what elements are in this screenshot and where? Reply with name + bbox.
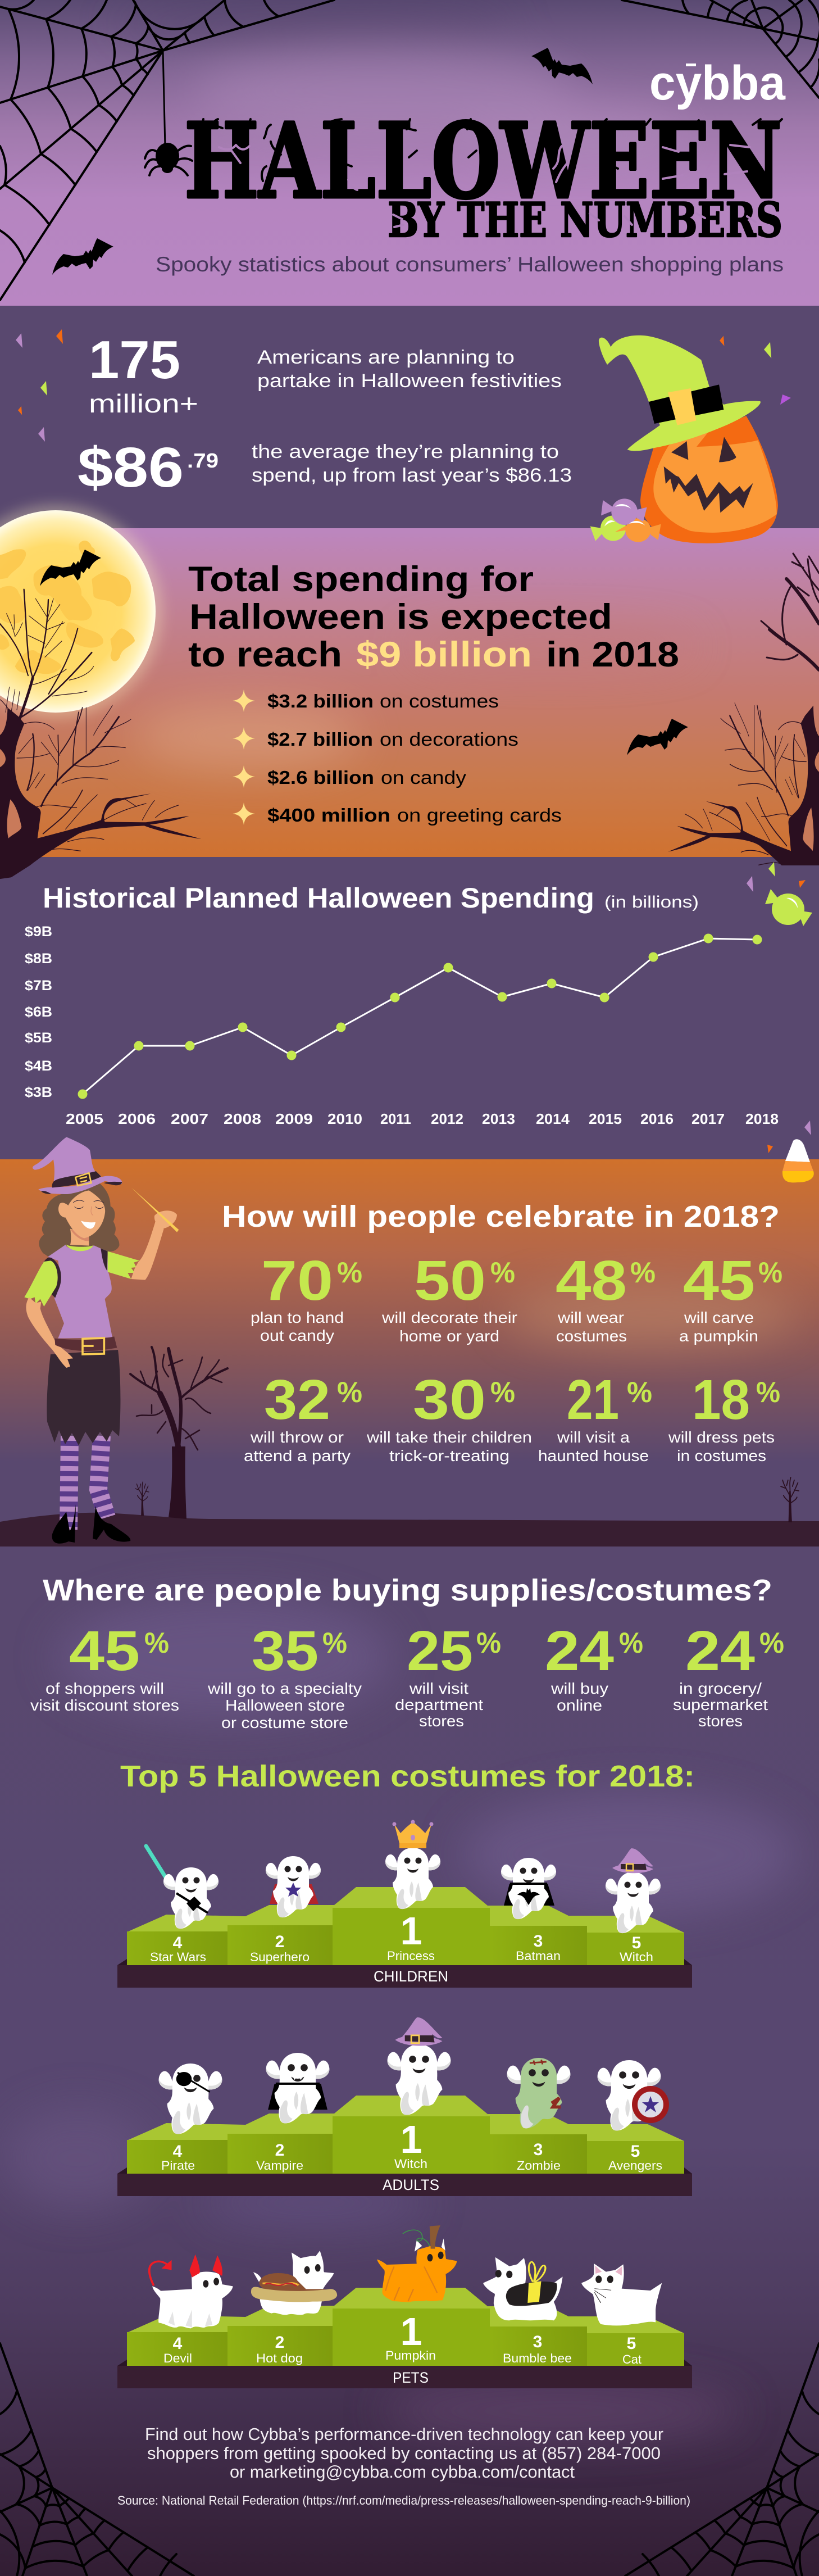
cobweb: top right <box>622 0 819 98</box>
stat: 30%: trick-or-treating <box>389 1447 509 1464</box>
text: americans <box>257 347 562 392</box>
moon <box>0 505 162 718</box>
stat: specialty store: will go to a specialty <box>207 1680 362 1697</box>
stat: 21%: haunted house <box>538 1447 649 1464</box>
stat: 18% <box>668 1368 780 1464</box>
tree: celebrate small right <box>781 1477 799 1522</box>
ghost: star wars <box>146 1846 219 1929</box>
line chart: 2008 <box>224 1110 261 1127</box>
stat: 18%: % <box>756 1376 780 1409</box>
witch <box>24 1137 179 1544</box>
shoes <box>52 1504 130 1544</box>
stat: 18%: 18 <box>692 1368 750 1431</box>
panel: chart background <box>0 857 819 1159</box>
confetti: chart <box>747 862 811 1153</box>
podium labels: children <box>150 1909 653 1985</box>
stat: online: online <box>557 1697 602 1714</box>
podium labels: adults: Zombie <box>517 2158 561 2173</box>
stat: grocery: supermarket <box>673 1696 768 1713</box>
line chart: 2006 <box>118 1110 156 1127</box>
panel: stats background <box>0 306 819 528</box>
text: average spend <box>252 441 572 486</box>
panel: spending background <box>0 528 819 857</box>
podium labels: children: 2 <box>275 1933 284 1951</box>
bullet: candy: $2.6 billion <box>267 767 374 788</box>
footer text: or marketing@cybba.com cybba.com/contact <box>230 2462 575 2482</box>
tree: right upper <box>761 554 819 670</box>
bullet: candy <box>233 765 467 788</box>
source: Source: National Retail Federation (https://nrf.com/media/press-releases/halloween-spending-reach-9-billion) <box>117 2493 690 2507</box>
podium labels: pets: 5 <box>627 2334 636 2353</box>
ghost: witch <box>388 2017 451 2115</box>
cobweb: bottom right <box>625 2343 819 2576</box>
stat: discount stores: % <box>144 1627 169 1659</box>
icon: candy corn <box>782 1139 814 1182</box>
line chart: $7B <box>25 978 52 994</box>
stat: specialty store: or costume store <box>221 1714 348 1731</box>
ghost: witch <box>606 1848 661 1933</box>
pet: bumble bee <box>483 2257 563 2320</box>
heading: total spending: Total spending for <box>188 560 534 599</box>
stat: discount stores: 45 <box>69 1620 140 1682</box>
stat: department stores: % <box>476 1627 501 1659</box>
arms <box>26 1297 73 1368</box>
line chart: $3B <box>25 1085 52 1100</box>
podium: children <box>117 1820 692 1988</box>
panel: header background <box>0 0 819 306</box>
line chart: 2010 <box>327 1110 362 1127</box>
podium labels: pets: Pumpkin <box>385 2348 436 2362</box>
podium labels: adults: ADULTS <box>383 2176 439 2193</box>
bat: top right <box>531 48 593 84</box>
bullet: greeting cards <box>233 802 562 826</box>
stat: grocery: in grocery/ <box>679 1680 762 1697</box>
podium labels: pets: Cat <box>622 2352 641 2366</box>
stat: 45% carve: will carve <box>684 1309 754 1326</box>
stat: 32%: attend a party <box>244 1447 351 1464</box>
stat: 70%: out candy <box>260 1327 334 1344</box>
heading: celebrate: How will people celebrate in 2018? <box>222 1200 780 1233</box>
stat: 32% <box>244 1368 362 1464</box>
bullet: costumes: $3.2 billion <box>267 691 374 711</box>
podium labels: adults: Pirate <box>161 2158 195 2173</box>
text: americans: Americans are planning to <box>257 347 515 368</box>
stat: discount stores: of shoppers will <box>46 1680 164 1697</box>
stat: department stores: stores <box>419 1712 464 1730</box>
bullet: greeting cards: $400 million <box>267 805 390 826</box>
line chart: $4B <box>25 1058 52 1074</box>
stat: online: 24 <box>545 1620 614 1682</box>
text: average spend: spend, up from last year’s $86.13 <box>252 465 572 486</box>
line chart: 2015 <box>589 1110 622 1127</box>
heading: total spending: to reach <box>188 635 342 674</box>
stat: $86.79: .79 <box>187 449 219 472</box>
stat: 70%: % <box>337 1257 362 1289</box>
stat: 50%: will decorate their <box>381 1309 517 1326</box>
stat: specialty store: 35 <box>252 1620 319 1682</box>
line chart: 2013 <box>482 1110 515 1127</box>
stat: 45% carve: 45 <box>683 1249 755 1312</box>
podium labels: adults <box>161 2117 662 2193</box>
podium labels: adults: Witch <box>394 2157 427 2171</box>
heading: total spending: Halloween is expected <box>189 597 612 637</box>
line chart: $6B <box>25 1004 52 1020</box>
stat: 48%: costumes <box>556 1327 627 1345</box>
podium labels: pets: Hot dog <box>256 2351 303 2365</box>
icon: pumpkin with witch hat <box>590 335 778 543</box>
podium labels: pets <box>163 2310 641 2386</box>
stat: 32%: 32 <box>264 1368 330 1431</box>
podium labels: children: Star Wars <box>150 1950 206 1964</box>
stat: grocery <box>673 1620 784 1730</box>
bullet: greeting cards: on greeting cards <box>397 805 562 826</box>
stat: 45% carve: % <box>758 1257 782 1289</box>
stat: 21%: 21 <box>567 1368 619 1431</box>
podium labels: adults: Vampire <box>256 2158 303 2173</box>
stat: grocery: stores <box>698 1712 743 1730</box>
stat: 48% <box>556 1249 656 1345</box>
cobweb: top left <box>0 0 334 300</box>
stat: 70%: 70 <box>261 1249 333 1312</box>
spider <box>145 51 192 175</box>
stat: online <box>545 1620 643 1714</box>
podium labels: adults: Avengers <box>608 2158 662 2173</box>
heading: total spending: in 2018 <box>546 635 679 674</box>
ghost: princess <box>385 1820 440 1909</box>
stat: 21%: % <box>627 1376 652 1409</box>
subtitle: Spooky statistics about consumers’ Halloween shopping plans <box>156 253 784 276</box>
spending clouds <box>135 629 697 770</box>
stat: 21%: will visit a <box>557 1428 630 1446</box>
heading: where: Where are people buying supplies/costumes? <box>43 1573 772 1607</box>
stat: department stores <box>395 1620 501 1730</box>
pet: cat <box>581 2264 662 2325</box>
ground <box>0 1513 819 1546</box>
skirt <box>47 1350 120 1445</box>
line chart: $8B <box>25 951 52 967</box>
stat: discount stores: visit discount stores <box>30 1697 179 1714</box>
line chart: 2011 <box>380 1110 411 1127</box>
stat: 50%: home or yard <box>399 1327 499 1345</box>
legs <box>69 1436 107 1530</box>
icon: green candy <box>765 889 812 926</box>
lower clouds <box>6 1596 798 2442</box>
celebrate clouds <box>506 1281 798 1349</box>
stat: 32%: will throw or <box>250 1428 344 1446</box>
podium labels: pets: 1 <box>401 2310 422 2353</box>
stat: 30%: will take their children <box>366 1428 532 1446</box>
ghost: pirate <box>159 2063 222 2134</box>
stat: 21% <box>538 1368 652 1464</box>
header clouds <box>112 0 685 166</box>
line chart: 2007 <box>171 1110 208 1127</box>
stat: 18%: in costumes <box>677 1447 766 1464</box>
tree: celebrate large <box>130 1347 228 1519</box>
text: average spend: the average they’re planning to <box>252 441 559 462</box>
podium labels: children: Princess <box>387 1949 435 1963</box>
pet: hot dog <box>251 2251 337 2315</box>
stat: 70%: plan to hand <box>251 1309 344 1326</box>
line chart: 2012 <box>431 1110 463 1127</box>
pet: devil <box>149 2255 233 2328</box>
bullet: costumes: on costumes <box>380 691 499 711</box>
stat: 30% <box>366 1368 532 1464</box>
line chart: 2016 <box>640 1110 674 1127</box>
text: americans: partake in Halloween festivities <box>257 370 562 392</box>
line chart: $5B <box>25 1030 52 1046</box>
stat: 175 million: million+ <box>89 389 198 418</box>
belt <box>54 1336 117 1351</box>
stat: 175 million: 175 <box>89 330 180 390</box>
ghost: avengers <box>598 2060 669 2130</box>
stat: 50%: 50 <box>414 1249 486 1312</box>
stat: 30%: % <box>490 1376 515 1409</box>
line chart: 2017 <box>691 1110 725 1127</box>
podium labels: pets: Bumble bee <box>503 2351 572 2365</box>
line chart: 2009 <box>275 1110 313 1127</box>
podium labels: pets: 3 <box>533 2333 542 2351</box>
stat: specialty store: Halloween store <box>225 1697 345 1714</box>
heading: historical chart: (in billions) <box>604 893 699 911</box>
podium labels: adults: 2 <box>275 2141 284 2160</box>
heading: top 5: Top 5 Halloween costumes for 2018: <box>120 1759 695 1793</box>
bat: header left <box>52 238 113 275</box>
line chart <box>25 924 779 1127</box>
ghost: vampire <box>266 2053 329 2123</box>
stat: department stores: 25 <box>407 1620 473 1682</box>
stat: 50% <box>381 1249 517 1345</box>
podium labels: children: 1 <box>401 1909 422 1953</box>
panel: lower background <box>0 1546 819 2576</box>
tree: left <box>0 589 201 879</box>
stat: specialty store: % <box>322 1627 347 1659</box>
podium labels: children: CHILDREN <box>374 1968 448 1985</box>
stat: grocery: % <box>759 1627 784 1659</box>
line chart: 2018 <box>745 1110 779 1127</box>
bullet: candy: on candy <box>381 767 467 788</box>
confetti: stats <box>16 329 791 442</box>
pet: pumpkin <box>377 2225 457 2302</box>
stat: grocery: 24 <box>685 1620 755 1682</box>
logo: cybba: cybba <box>649 56 786 110</box>
stat: department stores: department <box>395 1696 483 1713</box>
footer text <box>145 2424 663 2482</box>
panel: celebrate background <box>0 1159 819 1546</box>
bat: moon <box>40 550 101 586</box>
hair <box>39 1183 119 1257</box>
bullet: decorations: $2.7 billion <box>267 729 373 750</box>
stat: 30%: 30 <box>413 1368 486 1431</box>
stat: 48%: 48 <box>556 1249 627 1312</box>
podium labels: adults: 1 <box>401 2117 422 2161</box>
podium labels: adults: 4 <box>173 2142 183 2161</box>
stat: 32%: % <box>337 1376 362 1409</box>
stat: 48%: % <box>630 1257 656 1289</box>
podium labels: pets: 4 <box>173 2334 183 2353</box>
bullet: decorations <box>233 727 518 750</box>
podium labels: children: 5 <box>632 1934 641 1952</box>
neck and face <box>70 1229 89 1246</box>
footer text: shoppers from getting spooked by contacting us at (857) 284-7000 <box>147 2443 661 2463</box>
stat: 175 million <box>89 330 198 418</box>
podium labels: children: 3 <box>534 1932 543 1951</box>
cobweb: bottom left <box>0 2343 194 2576</box>
podium labels: pets: PETS <box>393 2369 429 2386</box>
podium labels: children: Superhero <box>250 1950 310 1964</box>
heading: total spending <box>188 560 679 674</box>
bullet: costumes <box>233 690 499 712</box>
ghost: batman <box>501 1858 556 1919</box>
heading: historical chart: Historical Planned Halloween Spending <box>43 882 594 914</box>
line chart: $9B <box>25 924 52 940</box>
podium: pets <box>117 2225 692 2388</box>
podium labels: children: 4 <box>173 1934 183 1952</box>
stat: 48%: will wear <box>557 1309 624 1326</box>
line chart: 2005 <box>66 1110 103 1127</box>
podium labels: pets: 2 <box>275 2333 284 2352</box>
podium labels: children: Batman <box>516 1949 561 1963</box>
shirt <box>48 1245 112 1339</box>
stat: $86.79 <box>78 436 219 499</box>
stat: discount stores <box>30 1620 179 1714</box>
stat: 18%: will dress pets <box>668 1428 775 1446</box>
podium labels: pets: Devil <box>163 2351 192 2365</box>
podium labels: children: Witch <box>620 1950 653 1964</box>
ghost: superhero <box>266 1856 321 1917</box>
footer text: Find out how Cybba’s performance-driven technology can keep your <box>145 2424 663 2444</box>
stat: 50%: % <box>490 1257 515 1289</box>
candies <box>590 498 661 542</box>
hat <box>33 1137 101 1186</box>
podium: adults <box>117 2017 692 2196</box>
bullet: decorations: on decorations <box>380 729 518 750</box>
ghost: zombie <box>507 2058 570 2128</box>
podium labels: adults: 3 <box>534 2140 543 2159</box>
stat: 45% carve <box>679 1249 782 1345</box>
stat: online: will buy <box>550 1680 608 1697</box>
stat: $86.79: $86 <box>78 436 184 499</box>
bat: spending <box>627 719 688 755</box>
podium labels: adults: 5 <box>631 2142 640 2161</box>
stat: specialty store <box>207 1620 362 1731</box>
tree: celebrate small left <box>135 1482 149 1516</box>
line chart: 2014 <box>536 1110 570 1127</box>
sleeves <box>24 1260 58 1307</box>
stat: 70% <box>251 1249 362 1344</box>
stat: department stores: will visit <box>409 1680 468 1697</box>
tree: right lower <box>668 702 819 865</box>
stat: 45% carve: a pumpkin <box>679 1327 758 1345</box>
stat: online: % <box>619 1627 643 1659</box>
heading: total spending: $9 billion <box>356 635 532 674</box>
